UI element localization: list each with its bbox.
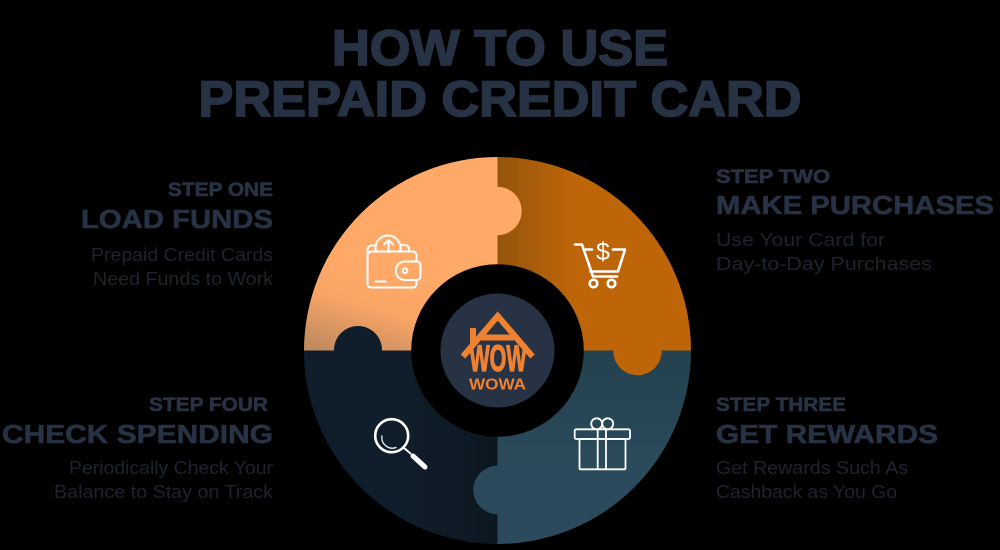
- panel: step one text: STEP ONE: [168, 180, 273, 201]
- panel: step one text: Prepaid Credit Cards: [91, 245, 273, 265]
- panel: step four text: [2, 395, 274, 502]
- panel: step one text: Need Funds to Work: [93, 269, 274, 289]
- panel: step three text: [716, 395, 938, 502]
- panel: step four text: Periodically Check Your: [69, 458, 273, 478]
- segment: step four navy: [304, 350, 498, 544]
- puzzle tab: orange: [613, 327, 662, 375]
- center disc: [440, 294, 554, 408]
- icon: wallet: [368, 235, 420, 288]
- panel: step one text: [81, 180, 274, 289]
- panel: step four text: STEP FOUR: [149, 395, 268, 416]
- title: [198, 20, 802, 127]
- panel: step four text: CHECK SPENDING: [2, 419, 273, 449]
- panel: step one text: LOAD FUNDS: [81, 204, 273, 234]
- panel: step three text: Cashback as You Go: [716, 482, 897, 502]
- segment: step two orange: [498, 157, 691, 350]
- puzzle tab: navy: [334, 326, 382, 374]
- segment: step three teal: [498, 350, 691, 544]
- puzzle tab: peach: [473, 187, 522, 235]
- icon: gift box: [575, 418, 630, 469]
- panel: step four text: Balance to Stay on Track: [54, 482, 274, 502]
- logo WOWA wordmark: WOWA: [469, 376, 526, 394]
- panel: step two text: [716, 167, 994, 274]
- title: HOW TO USE: [332, 20, 668, 76]
- icon: shopping cart: $: [596, 238, 610, 266]
- panel: step two text: STEP TWO: [716, 167, 830, 188]
- panel: step three text: GET REWARDS: [716, 419, 938, 449]
- puzzle wheel: [304, 157, 691, 544]
- panel: step two text: Day-to-Day Purchases: [716, 254, 932, 274]
- title: PREPAID CREDIT CARD: [198, 71, 802, 127]
- logo WOW wordmark: WOW: [470, 338, 527, 379]
- panel: step two text: MAKE PURCHASES: [716, 190, 994, 220]
- segment: step one peach: [304, 157, 498, 350]
- logo roof: [463, 316, 532, 356]
- icon: magnifying glass: [375, 419, 425, 467]
- center black ring: [411, 264, 584, 437]
- icon: shopping cart: [575, 238, 625, 287]
- panel: step three text: STEP THREE: [716, 395, 846, 416]
- panel: step two text: Use Your Card for: [716, 230, 885, 250]
- panel: step three text: Get Rewards Such As: [716, 458, 908, 478]
- logo: WOWA house: [463, 316, 532, 394]
- puzzle tab: teal: [473, 466, 522, 514]
